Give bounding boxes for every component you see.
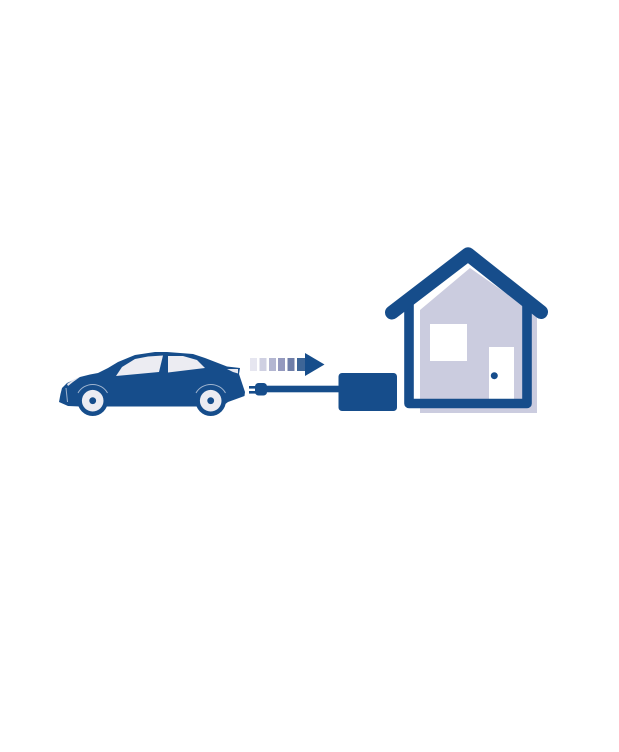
- icon: house: [392, 254, 541, 413]
- roof: [392, 254, 541, 312]
- icon: plug and charging cord: [249, 383, 340, 396]
- window: [430, 324, 467, 361]
- icon: charging box: [338, 373, 397, 411]
- grille highlight: [66, 388, 68, 402]
- arrow: power flow direction: [250, 353, 324, 376]
- walls: [409, 298, 527, 404]
- icon: car: [59, 352, 245, 416]
- house shadow fill: [420, 268, 537, 413]
- rear spoiler gap: [227, 369, 238, 374]
- headlight highlight: [67, 377, 80, 386]
- door knob: [491, 372, 498, 379]
- car body: [59, 352, 245, 406]
- door: [489, 347, 514, 400]
- front side window: [116, 356, 163, 376]
- rear wheel: [195, 384, 226, 416]
- rear side window: [168, 356, 205, 372]
- front wheel: [77, 384, 108, 416]
